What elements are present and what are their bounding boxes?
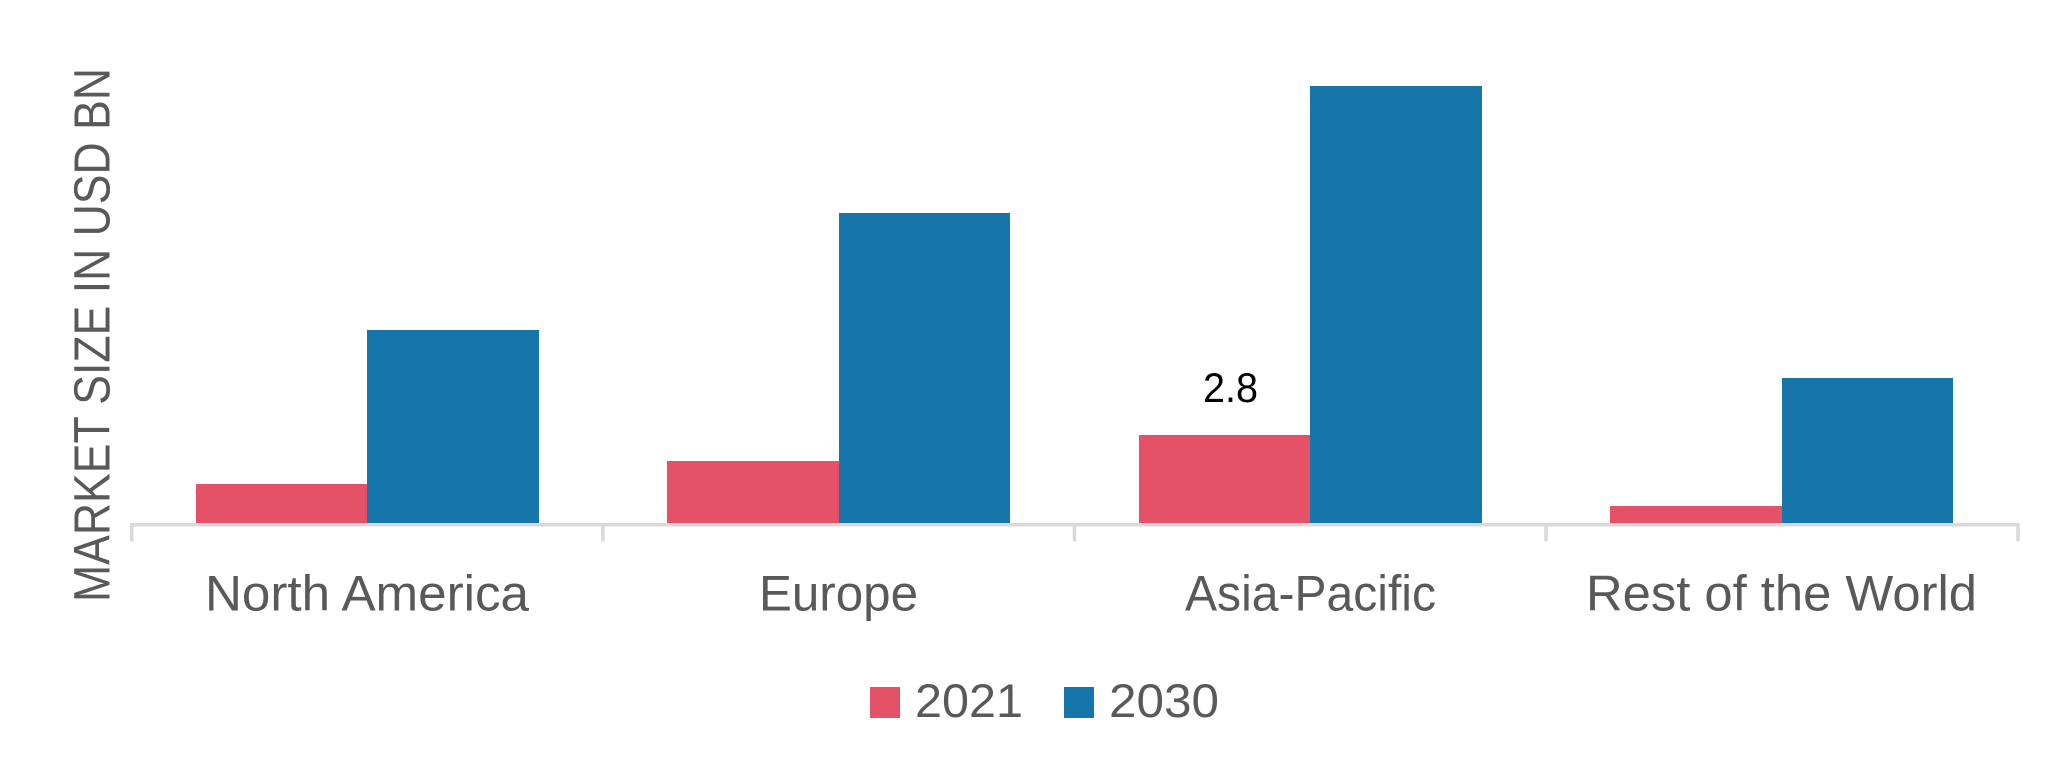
legend	[870, 674, 1219, 727]
y axis title: MARKET SIZE IN USD BN	[64, 68, 120, 602]
group: Asia-Pacific bars	[1139, 86, 1482, 524]
group: Rest of the World bars	[1610, 378, 1953, 524]
category label: North America: North America	[205, 566, 529, 622]
x axis line and ticks	[132, 525, 2018, 542]
category label: Asia-Pacific: Asia-Pacific	[1185, 566, 1436, 622]
group: North America bars	[196, 330, 539, 524]
legend label: 2030: 2030	[1109, 674, 1219, 727]
legend swatch: 2021	[870, 687, 900, 718]
data label: Asia-Pacific 2021: 2.8	[1203, 364, 1258, 411]
group: Europe bars	[667, 213, 1010, 524]
category label: Europe: Europe	[759, 566, 918, 622]
legend label: 2021: 2021	[915, 674, 1023, 727]
category label: Rest of the World: Rest of the World	[1586, 566, 1977, 622]
legend swatch: 2030	[1064, 687, 1094, 718]
